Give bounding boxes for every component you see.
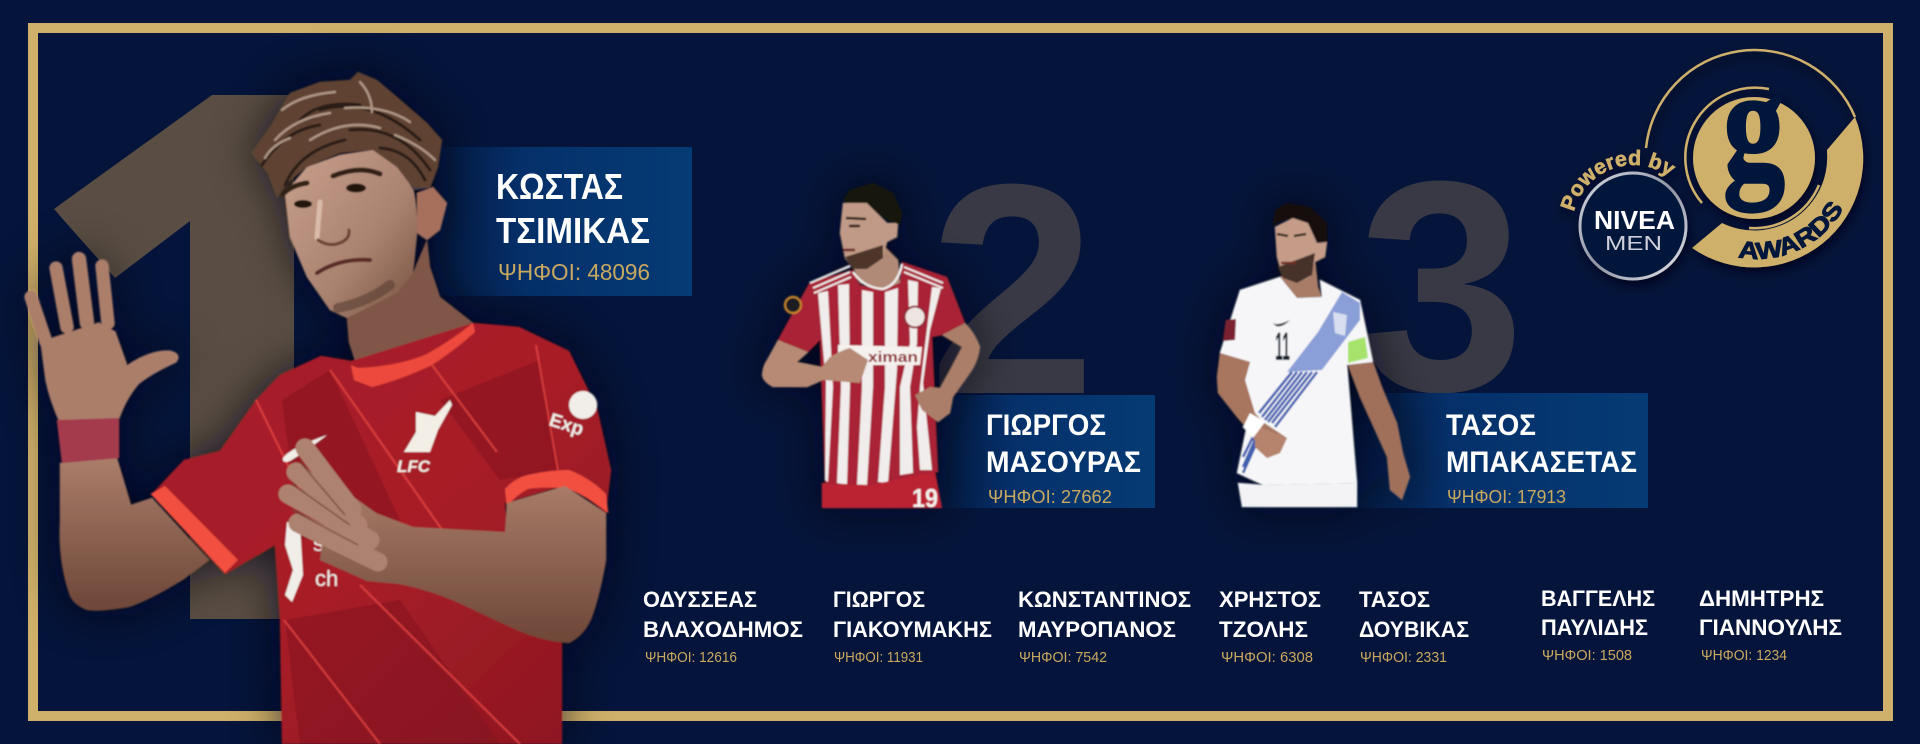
name panel: second place: ΓΙΩΡΓΟΣ: [986, 409, 1106, 442]
runner-up 10: ΔΗΜΗΤΡΗΣ: [1699, 586, 1824, 611]
left arm and hand: [762, 340, 868, 387]
name panel: second place: ΜΑΣΟΥΡΑΣ: [986, 446, 1141, 479]
collar: [351, 323, 475, 387]
shirt sponsor: ch: [315, 566, 338, 591]
left arm: [60, 458, 209, 611]
MEN wordmark: MEN: [1605, 233, 1662, 255]
letter g: g: [1723, 34, 1785, 213]
name panel: first place: ΤΣΙΜΙΚΑΣ: [496, 210, 650, 251]
eyes and mouth: [1277, 234, 1306, 263]
sponsor band: ximan: [868, 349, 918, 366]
swoosh: [1272, 320, 1290, 326]
shorts: [1238, 483, 1357, 507]
badge circle: [1580, 173, 1686, 279]
outer arc: [1646, 50, 1855, 148]
competition patch: [1223, 319, 1236, 341]
player photo: second place: [762, 183, 980, 513]
runner-up 6: ΚΩΝΣΤΑΝΤΙΝΟΣ: [1018, 587, 1191, 612]
hair: [252, 72, 442, 197]
neck: [347, 240, 473, 370]
runner-up 8: ΤΑΣΟΣ: [1359, 587, 1430, 612]
name panel: first place: ΨΗΦΟΙ: 48096: [498, 259, 650, 285]
head: [1275, 218, 1327, 283]
runner-up 5: ΓΙΑΚΟΥΜΑΚΗΣ: [833, 617, 992, 642]
runner-up 4: ΟΔΥΣΣΕΑΣ: [643, 587, 757, 612]
hand: [1255, 425, 1287, 458]
shirt sponsor: st: [313, 531, 330, 556]
runner-up 5: [833, 587, 992, 666]
sash stripes: [1243, 372, 1317, 473]
runner-up 7: ΤΖΟΛΗΣ: [1219, 617, 1308, 642]
runner-up 6: [1018, 587, 1191, 666]
rank number 3: 3: [1358, 118, 1525, 454]
powered by label: Powered by: [1560, 150, 1676, 218]
hair: [1273, 203, 1327, 242]
sash flag: [1333, 312, 1347, 336]
jersey: [152, 323, 611, 744]
gold band: [1692, 117, 1863, 267]
runner-up 10: ΨΗΦΟΙ: 1234: [1701, 647, 1787, 664]
facial features: [283, 170, 390, 308]
runners-up list: [643, 586, 1842, 666]
inner arcs: [1685, 88, 1769, 203]
name panel: third place: ΤΑΣΟΣ: [1446, 409, 1536, 442]
name panel: first place: [434, 147, 692, 296]
neck: [853, 247, 900, 290]
runner-up 7: ΨΗΦΟΙ: 6308: [1221, 649, 1313, 666]
sleeve cuff right: [505, 470, 608, 513]
runner-up 9: [1541, 586, 1655, 664]
jersey folds: [282, 360, 560, 744]
runner-up 9: ΒΑΓΓΕΛΗΣ: [1541, 586, 1655, 611]
sleeve sponsor: Exp: [546, 410, 586, 441]
hair side fade: [397, 167, 430, 190]
runner-up 8: [1359, 587, 1469, 666]
raised hand: [31, 259, 178, 422]
head: [285, 150, 417, 318]
white shirt: [1220, 277, 1373, 485]
runner-up 5: ΨΗΦΟΙ: 11931: [834, 649, 923, 666]
runner-up 4: ΒΛΑΧΟΔΗΜΟΣ: [643, 617, 803, 642]
wristband: [1243, 413, 1265, 438]
neck: [1280, 260, 1322, 298]
hair strands: [262, 82, 435, 185]
crest: [904, 306, 926, 328]
runner-up 8: ΔΟΥΒΙΚΑΣ: [1359, 617, 1469, 642]
shoulder stripes: [810, 266, 943, 293]
ear: [417, 187, 447, 240]
head: [840, 203, 898, 268]
name panel: second place: ΨΗΦΟΙ: 27662: [988, 486, 1112, 507]
white stripes: [818, 280, 941, 485]
player photo: third place: 11: [1275, 325, 1290, 369]
left arm: [1217, 353, 1287, 458]
runner-up 7: ΧΡΗΣΤΟΣ: [1219, 587, 1321, 612]
beard: [1278, 253, 1315, 283]
club crest: [397, 400, 452, 476]
beard: [845, 245, 883, 269]
runner-up 9: ΨΗΦΟΙ: 1508: [1542, 647, 1632, 664]
runner-up 6: ΨΗΦΟΙ: 7542: [1019, 649, 1107, 666]
runner-up 5: ΓΙΩΡΓΟΣ: [833, 587, 925, 612]
runner-up 6: ΜΑΥΡΟΠΑΝΟΣ: [1018, 617, 1176, 642]
name panel: third place: ΜΠΑΚΑΣΕΤΑΣ: [1446, 446, 1637, 479]
runner-up 9: ΠΑΥΛΙΔΗΣ: [1541, 615, 1648, 640]
name panel: third place: [1345, 393, 1648, 508]
rank number 2: 2: [929, 121, 1096, 457]
runner-up 4: [643, 587, 803, 666]
player photo: third place: [1217, 203, 1410, 507]
armband: [1348, 337, 1368, 363]
right forearm and hand: [320, 480, 606, 643]
runner-up 10: [1699, 586, 1842, 664]
gold disc: [1693, 97, 1815, 219]
blue sash: [1287, 292, 1360, 372]
runner-up 10: ΓΙΑΝΝΟΥΛΗΣ: [1699, 615, 1842, 640]
name panel: third place: ΨΗΦΟΙ: 17913: [1447, 486, 1566, 507]
AWARDS label: AWARDS: [1738, 202, 1842, 260]
sleeve cuff left: [151, 486, 238, 573]
sponsor band: [838, 345, 922, 366]
name panel: first place: ΚΩΣΤΑΣ: [496, 166, 623, 207]
collar: [853, 264, 902, 289]
runner-up 8: ΨΗΦΟΙ: 2331: [1360, 649, 1447, 666]
swoosh: [283, 435, 327, 462]
shorts: [822, 472, 942, 513]
wristband: [57, 418, 119, 463]
awards logo: [1644, 34, 1870, 277]
runner-up 4: ΨΗΦΟΙ: 12616: [645, 649, 737, 666]
sleeve sponsor: [546, 391, 597, 441]
NIVEA wordmark: NIVEA: [1594, 205, 1675, 235]
player photo: first place: [31, 72, 611, 744]
hair: [843, 183, 902, 225]
eyes and mouth: [843, 218, 866, 250]
powered by NIVEA MEN badge: [1560, 150, 1695, 290]
runner-up 7: [1219, 587, 1321, 666]
right arm: [1348, 362, 1410, 500]
name panel: second place: [937, 395, 1155, 508]
sleeve patch: [785, 297, 801, 313]
right arm and hand: [915, 323, 980, 422]
shorts: 19: [912, 483, 938, 513]
shirt sponsor: [285, 522, 338, 602]
club crest: LFC: [397, 457, 431, 476]
striped shirt: [778, 262, 965, 485]
